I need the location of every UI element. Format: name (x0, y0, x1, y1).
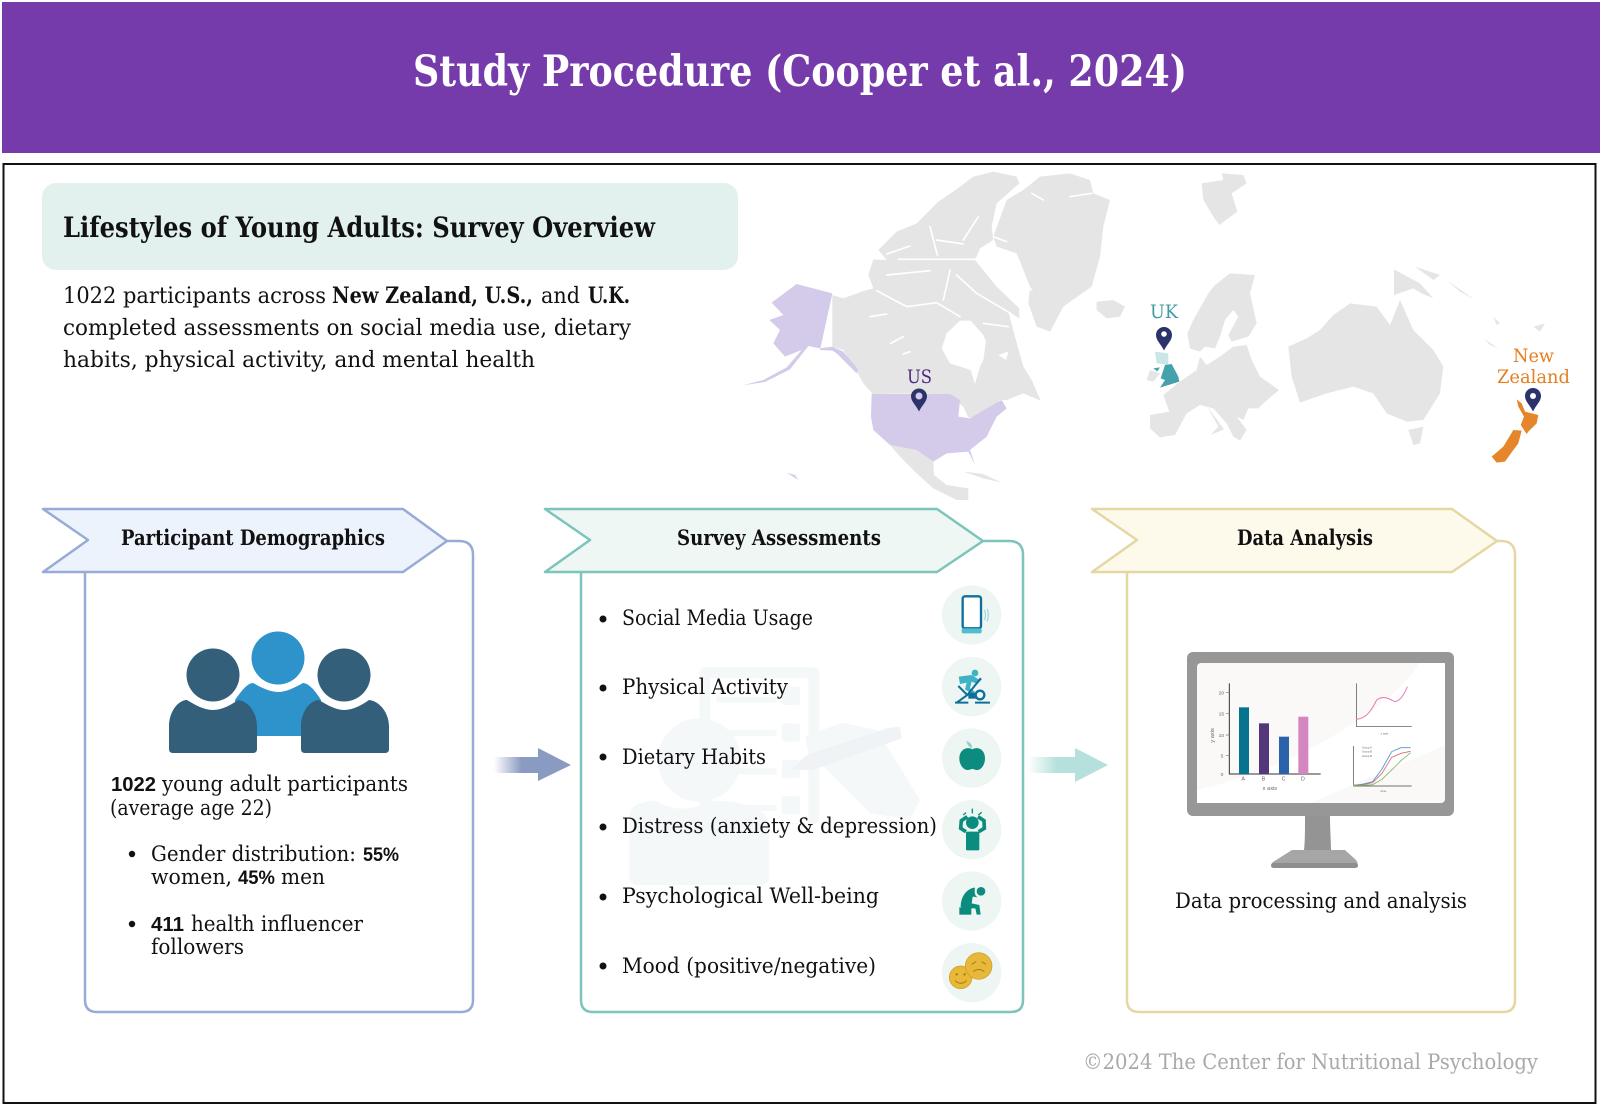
bar chart: B (1262, 777, 1266, 783)
arrow: assessments to analysis (1028, 748, 1108, 782)
overview paragraph: and (541, 284, 580, 309)
world map (743, 172, 1570, 500)
bar chart: D (1301, 777, 1305, 783)
icon: group of people (169, 632, 389, 753)
gender bullet: men (281, 865, 325, 889)
assessment icons (942, 585, 1001, 1002)
overview paragraph (63, 283, 632, 373)
influencer bullet (129, 912, 364, 959)
bar chart: 15 (1219, 711, 1224, 717)
overview paragraph: completed assessments on social media use, dietary (63, 316, 632, 341)
bar chart: 5 (1221, 753, 1224, 759)
survey overview box (42, 183, 738, 270)
participant summary text: young adult participants (161, 772, 408, 796)
label: US: US (907, 366, 932, 388)
banner: data analysis (1092, 509, 1497, 572)
banner: participant demographics (43, 509, 447, 572)
label: New Zealand (1497, 345, 1570, 388)
icon: phone (942, 585, 1001, 645)
bar chart: x axis (1263, 786, 1277, 792)
influencer bullet: health influencer (191, 912, 364, 936)
gender bullet: Gender distribution: (151, 842, 356, 866)
header banner (2, 2, 1600, 153)
influencer bullet: 411 (151, 914, 184, 936)
line chart: three groups (1354, 746, 1412, 793)
icon: exercise bike (942, 657, 1001, 716)
panel: survey assessments (545, 509, 1023, 1012)
participant summary text (110, 772, 408, 820)
pin: New Zealand (1497, 345, 1570, 412)
list item: mood: Mood (positive/negative) (622, 954, 876, 979)
arrow: demographics to assessments (494, 748, 571, 781)
icon: seated person (942, 871, 1001, 931)
line chart: three groups: Group A (1362, 746, 1372, 750)
data analysis caption: Data processing and analysis (1175, 889, 1467, 913)
line chart: single curve (1357, 683, 1412, 736)
title: Study Procedure (Cooper et al., 2024) (413, 47, 1187, 97)
participant summary text: 1022 (111, 774, 156, 796)
line chart: three groups: Group B (1362, 750, 1372, 754)
line chart: three groups: time (1381, 789, 1387, 793)
bar chart: 20 (1219, 690, 1224, 696)
bar chart: C (1282, 777, 1286, 783)
gender bullet: 55% (363, 845, 399, 866)
map: Europe, Oceania (1147, 173, 1545, 463)
label: New Zealand: Zealand (1497, 366, 1570, 388)
map: North America (743, 172, 1125, 500)
label: New Zealand: New (1513, 345, 1555, 367)
watermark: survey illustration (629, 667, 920, 885)
gender bullet (129, 842, 399, 889)
icon: apple (942, 728, 1001, 788)
gender bullet: women, (151, 865, 232, 889)
influencer bullet: followers (151, 935, 244, 959)
bar chart: 10 (1219, 733, 1224, 739)
overview paragraph: 1022 participants across (63, 284, 326, 309)
list item: dietary habits: Dietary Habits (622, 745, 766, 770)
participant summary text: (average age 22) (110, 796, 272, 820)
list item: social media usage: Social Media Usage (622, 606, 813, 631)
banner: participant demographics: Participant Demographics (121, 525, 385, 550)
pin: UK (1150, 301, 1179, 350)
icon: computer monitor with charts (1187, 652, 1454, 868)
banner: data analysis: Data Analysis (1237, 525, 1373, 550)
banner: survey assessments: Survey Assessments (677, 525, 881, 550)
pin: US (907, 366, 932, 412)
panel: participant demographics (43, 509, 473, 1012)
icon: distress (942, 800, 1001, 859)
gender bullet: 45% (238, 868, 275, 889)
bar chart: y axis (1210, 728, 1216, 743)
banner: survey assessments (545, 509, 983, 572)
label: UK: UK (1150, 301, 1179, 323)
overview paragraph: New Zealand, U.S., (332, 283, 533, 309)
bar chart: A (1241, 777, 1245, 783)
icon: mood faces (942, 943, 1001, 1002)
overview heading: Lifestyles of Young Adults: Survey Overview (63, 211, 656, 244)
panel: data analysis (1092, 509, 1515, 1012)
overview paragraph: habits, physical activity, and mental health (63, 348, 535, 373)
bar chart: 0 (1221, 772, 1224, 778)
line chart: single curve: x axis (1381, 732, 1389, 736)
line chart: three groups: Group B (1362, 754, 1372, 758)
list item: physical activity: Physical Activity (622, 675, 789, 700)
bar chart (1210, 683, 1321, 792)
copyright: ©2024 The Center for Nutritional Psychology (1083, 1050, 1539, 1075)
list item: psychological well-being: Psychological Well-being (622, 884, 879, 909)
overview paragraph: U.K. (588, 283, 630, 309)
list item: distress: Distress (anxiety & depression) (622, 814, 937, 839)
